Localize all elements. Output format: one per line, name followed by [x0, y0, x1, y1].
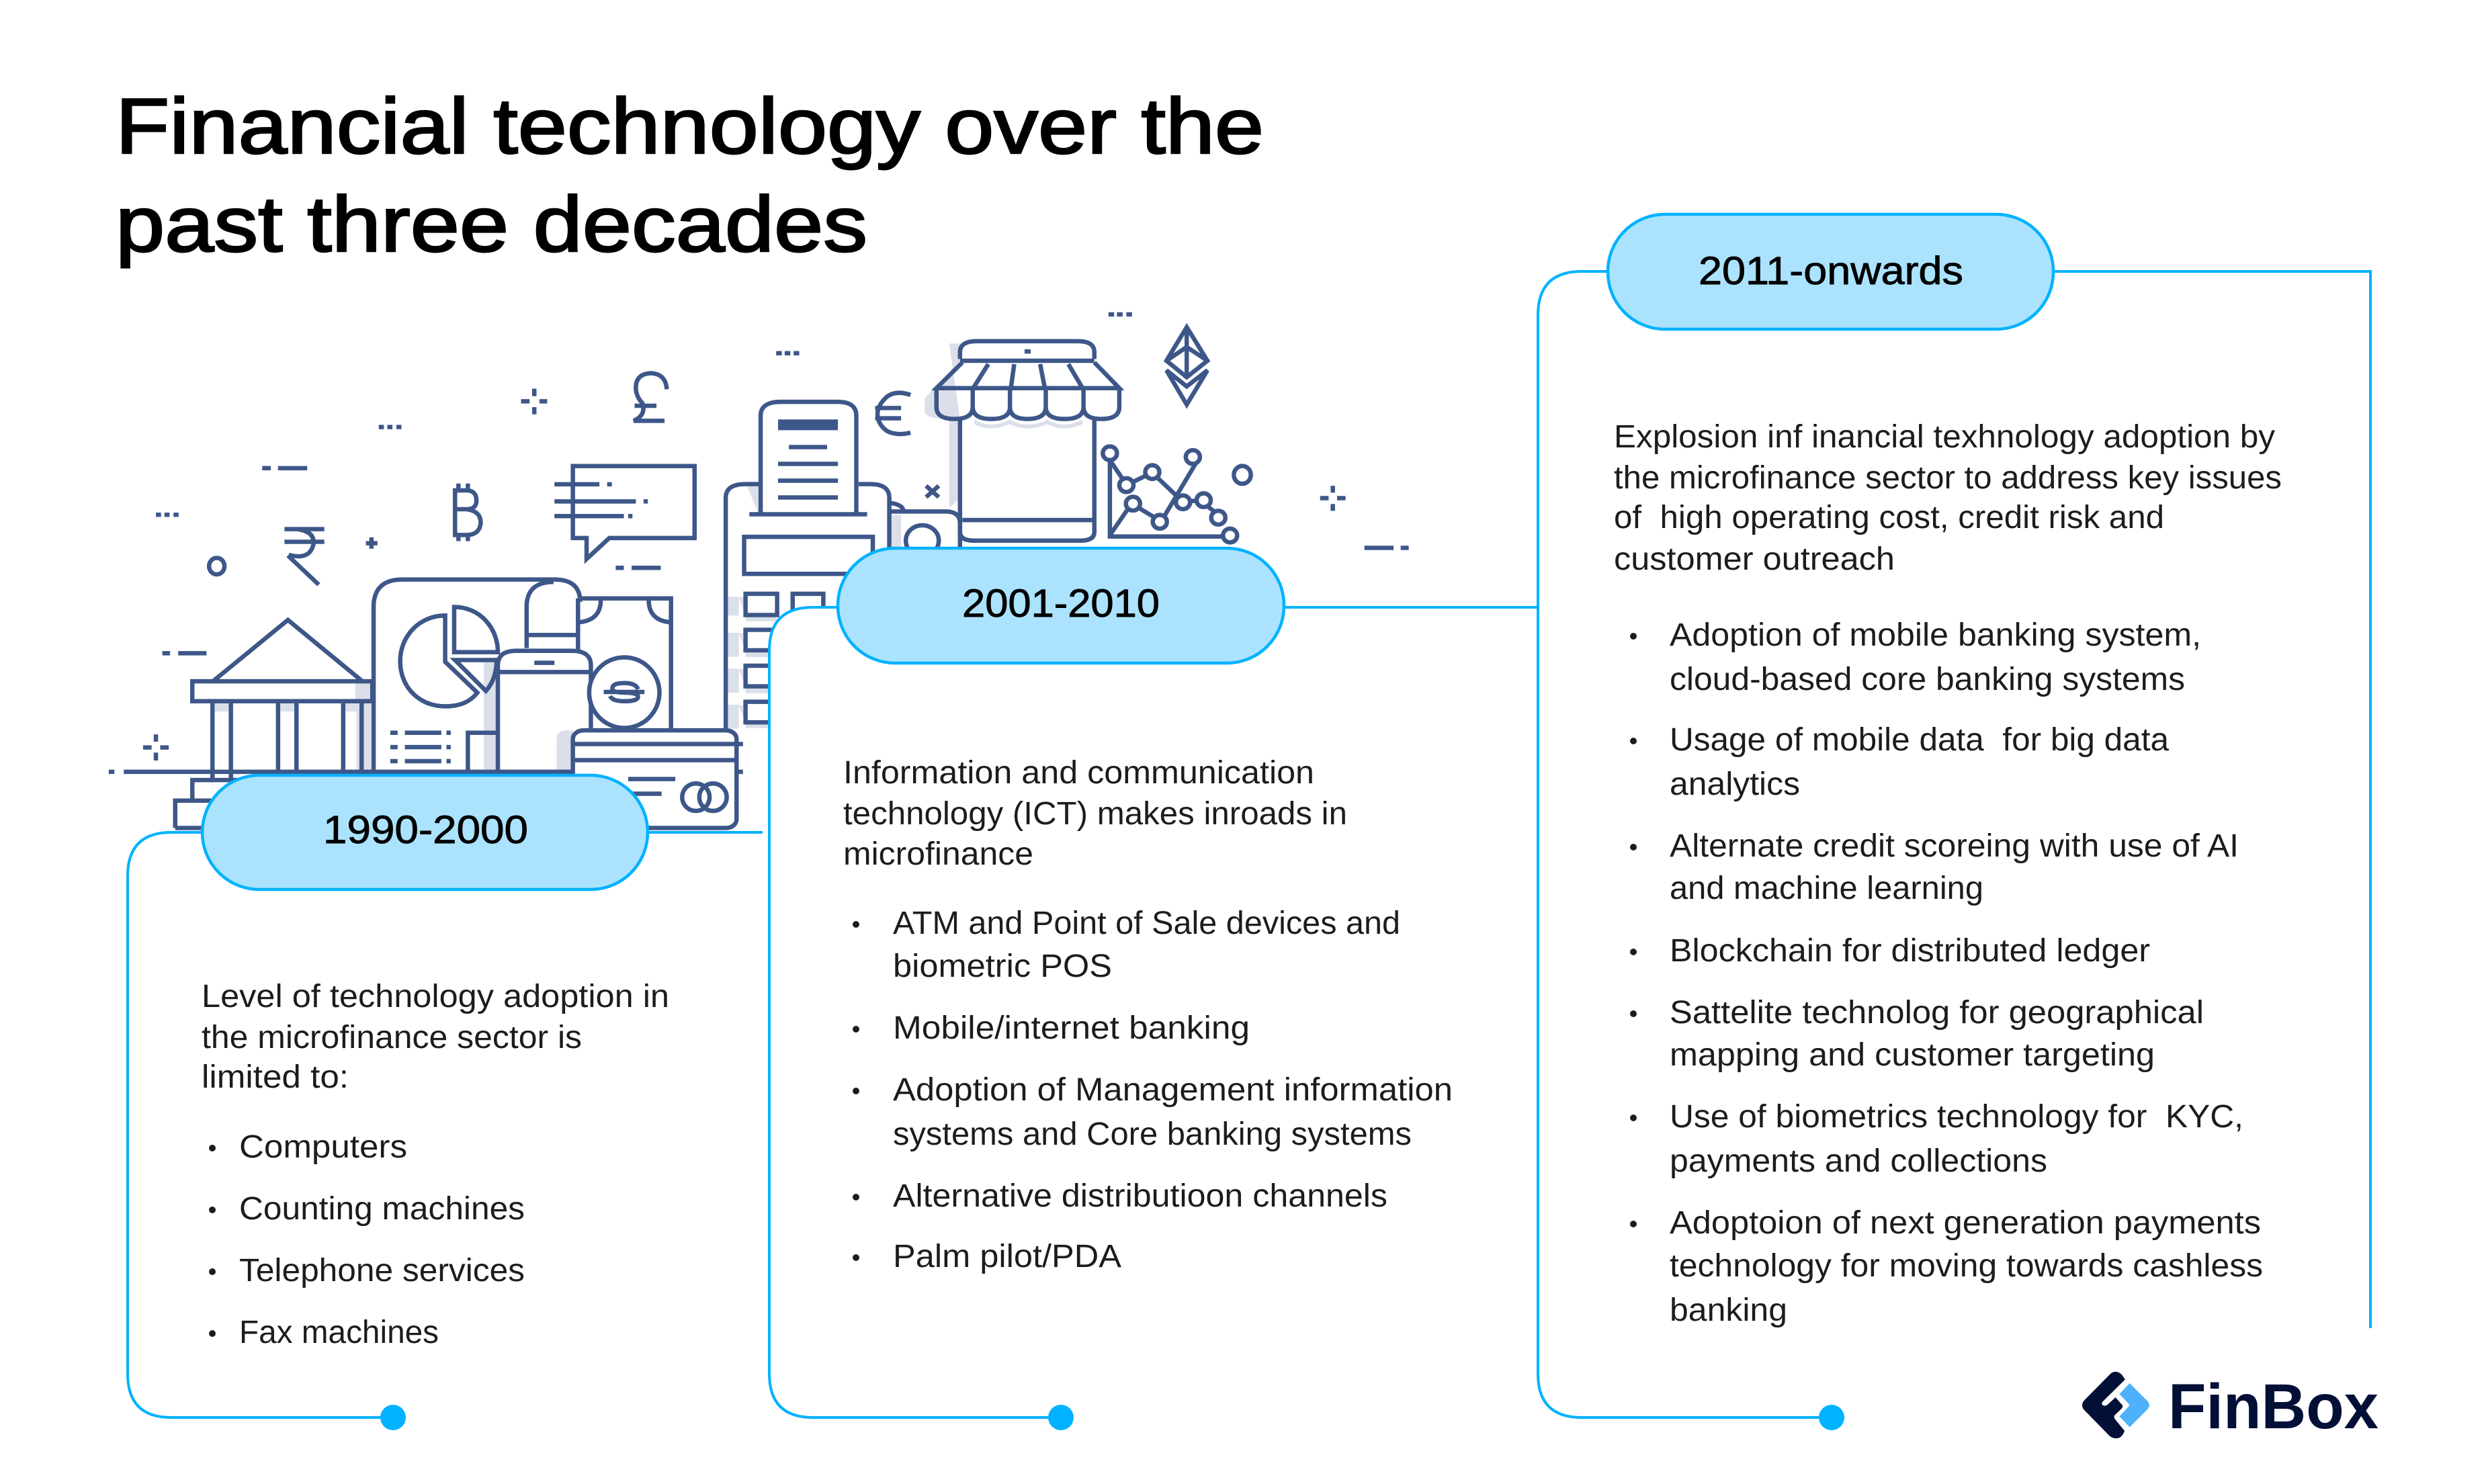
pill: 2001-2010: 2001-2010 — [962, 582, 1160, 625]
panel: 1990-2000 — [128, 775, 763, 1430]
illustration: finance and technology line icons — [109, 314, 1409, 828]
panel: 2001-2010 — [769, 548, 1538, 1430]
bullet list: Adoption of mobile banking system, — [1670, 617, 2201, 653]
intro text: Level of technology adoption in — [202, 979, 669, 1014]
title: Financial technology over the — [116, 82, 1264, 170]
bullet list: biometric POS — [893, 949, 1112, 984]
bullet list: and machine learning — [1670, 871, 1983, 906]
icon: POS terminal with receipt — [726, 402, 890, 728]
bullet list: analytics — [1670, 767, 1800, 802]
bullet list: technology for moving towards cashless — [1670, 1248, 2263, 1284]
logo: FinBox — [2082, 1371, 2378, 1442]
bullet list: Adoptoion of next generation payments — [1670, 1205, 2261, 1241]
timeline end dot — [1819, 1405, 1844, 1430]
icon: ethereum — [1166, 327, 1207, 404]
pill: 2011-onwards: 2011-onwards — [1699, 249, 1963, 293]
intro text — [1614, 419, 2282, 577]
bullet list: Adoption of Management information — [893, 1072, 1453, 1108]
timeline end dot — [380, 1405, 406, 1430]
icon: line chart — [1103, 446, 1237, 542]
bullet list: Palm pilot/PDA — [893, 1239, 1121, 1274]
bullet list: banking — [1670, 1293, 1787, 1328]
icon: dollar coin — [589, 657, 659, 728]
decorative marks — [143, 388, 660, 760]
bullet list: Counting machines — [239, 1191, 525, 1227]
logo: FinBox: FinBox — [2168, 1371, 2378, 1442]
bullet list: Alternate credit scoreing with use of AI — [1670, 828, 2239, 864]
icon: speech bubble — [554, 466, 695, 559]
bullet list — [1630, 617, 2263, 1328]
intro text: the microfinance sector to address key issues — [1614, 460, 2282, 496]
icon: bitcoin — [455, 484, 481, 541]
icon: rupee — [284, 529, 325, 584]
pill: 1990-2000: 1990-2000 — [323, 808, 528, 852]
intro text: of high operating cost, credit risk and — [1614, 500, 2164, 535]
bullet list: payments and collections — [1670, 1143, 2047, 1179]
bullet list: Telephone services — [239, 1253, 525, 1289]
intro text: Explosion inf inancial texhnology adoption by — [1614, 419, 2275, 455]
bullet list: systems and Core banking systems — [893, 1117, 1412, 1152]
bullet list: ATM and Point of Sale devices and — [893, 906, 1400, 941]
bullet list: Fax machines — [239, 1315, 439, 1350]
illustration: right group with terminal, shop, chart and currency symbols — [726, 314, 1409, 728]
icon: bank — [175, 620, 372, 828]
icon: camera — [890, 503, 960, 556]
intro text: Information and communication — [843, 755, 1314, 791]
bullet list: mapping and customer targeting — [1670, 1037, 2155, 1073]
bullet list: cloud-based core banking systems — [1670, 662, 2185, 697]
illustration: left group with bank, document, note, card and currency symbols — [109, 374, 743, 828]
pill: 2011-onwards — [1608, 214, 2053, 329]
bullet list — [853, 906, 1453, 1274]
title: past three decades — [116, 180, 867, 268]
ground line — [109, 770, 743, 774]
pill: 1990-2000 — [202, 775, 648, 889]
icon: FinBox mark — [2082, 1372, 2149, 1438]
intro text: the microfinance sector is — [202, 1020, 582, 1055]
bullet list: Alternative distributioon channels — [893, 1178, 1387, 1214]
intro text — [202, 979, 669, 1095]
bullet list: Mobile/internet banking — [893, 1010, 1250, 1046]
intro text: customer outreach — [1614, 541, 1895, 577]
bullet list: Sattelite technolog for geographical — [1670, 995, 2204, 1031]
icon: storefront phone — [937, 341, 1119, 541]
intro text: technology (ICT) makes inroads in — [843, 796, 1347, 832]
icon: banknote — [578, 599, 671, 730]
icon: pound — [634, 374, 667, 421]
bullet list: Usage of mobile data for big data — [1670, 722, 2169, 758]
timeline end dot — [1048, 1405, 1074, 1430]
icon: euro — [875, 393, 910, 434]
icon: mobile phone — [498, 651, 591, 772]
bullet list: Use of biometrics technology for KYC, — [1670, 1099, 2243, 1135]
icon: credit card — [573, 730, 743, 828]
decorative marks — [776, 314, 1409, 548]
intro text: microfinance — [843, 836, 1033, 872]
panel: 2011-onwards — [1538, 214, 2370, 1430]
bullet list — [209, 1129, 525, 1350]
bullet list: Blockchain for distributed ledger — [1670, 933, 2150, 969]
icon: document with pie chart — [374, 580, 580, 772]
bullet list: Computers — [239, 1129, 407, 1165]
intro text — [843, 755, 1347, 872]
intro text: limited to: — [202, 1059, 349, 1095]
pill: 2001-2010 — [838, 548, 1284, 663]
title — [116, 82, 1264, 268]
